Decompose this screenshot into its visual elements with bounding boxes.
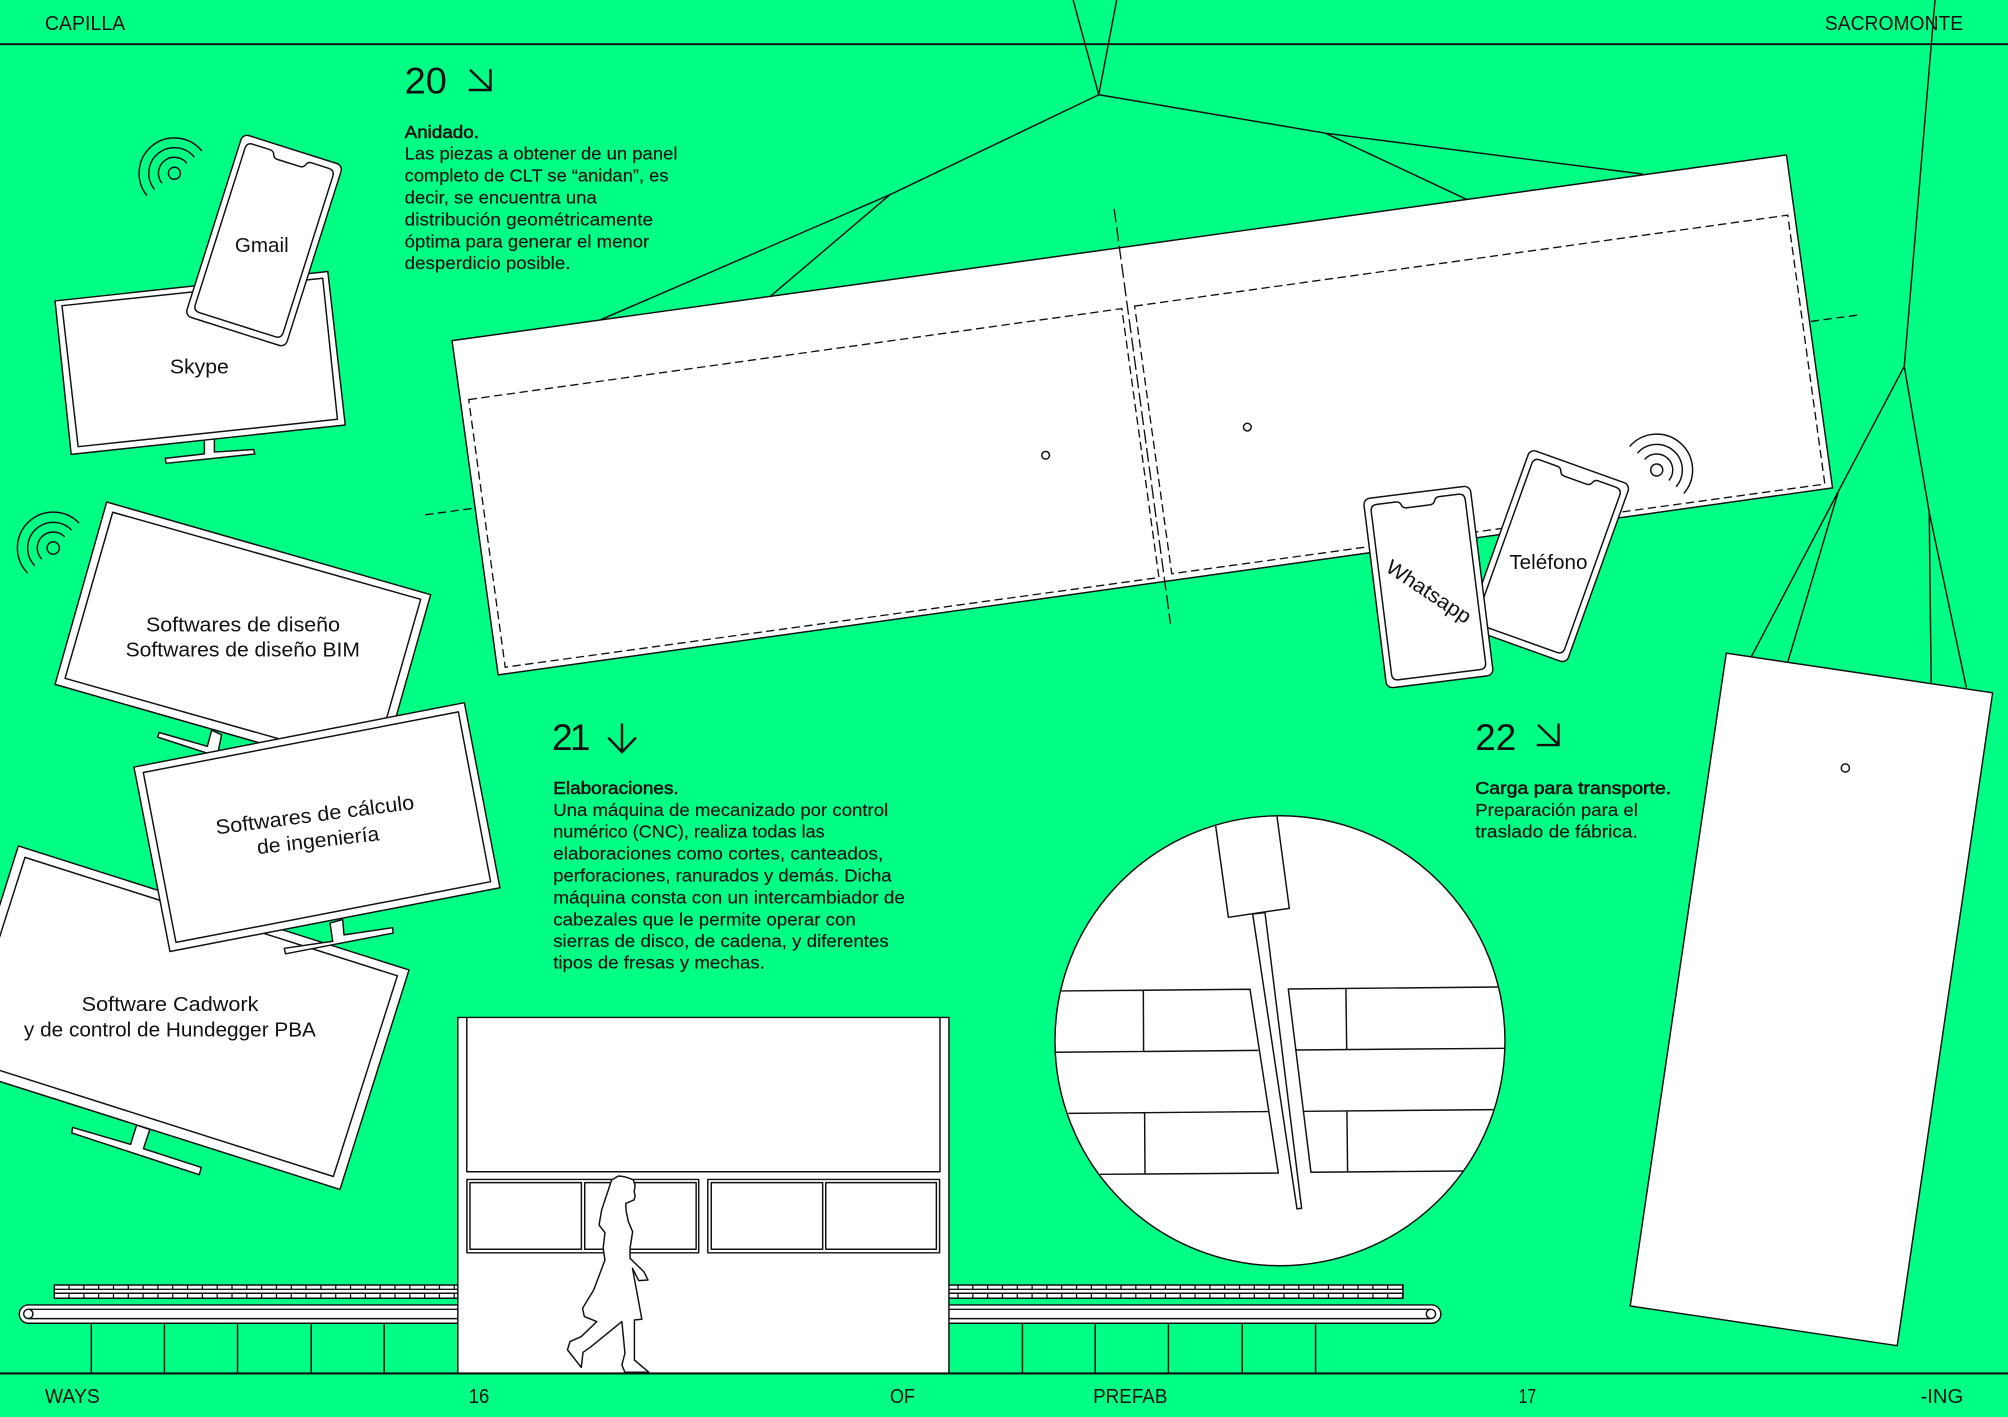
monitor: Skype: Skype	[170, 355, 229, 378]
text block: step 21: Elaboraciones.	[553, 778, 679, 798]
icon: wifi signal on panel	[1626, 419, 1707, 498]
icon: wifi signal left	[3, 497, 83, 577]
text block: step 20: Anidado.	[405, 122, 479, 142]
monitor: Softwares de diseño	[55, 502, 431, 779]
text block: step 20: desperdicio posible.	[405, 253, 571, 273]
text block: step 21: cabezales que le permite operar con	[553, 909, 856, 929]
text block: step 21: numérico (CNC), realiza todas las	[553, 822, 825, 842]
CNC detail circle	[1055, 816, 1505, 1266]
transport panel lifting hole	[1841, 764, 1849, 772]
monitor: Softwares de cálculo: Softwares de cálculo	[214, 791, 415, 839]
text block: step 20: Las piezas a obtener de un panel	[405, 144, 677, 164]
text block: step 21: tipos de fresas y mechas.	[553, 953, 765, 973]
stacked timber boards	[54, 1285, 1403, 1298]
footer label -ING: -ING	[1921, 1385, 1963, 1408]
text block: step 20: distribución geométricamente	[405, 210, 653, 230]
dashed right tick	[1811, 315, 1858, 321]
text block: step 21: elaboraciones como cortes, canteados,	[553, 844, 883, 864]
loaded panel for transport	[1630, 653, 1993, 1346]
monitor: Softwares de diseño: Softwares de diseño	[146, 614, 340, 637]
text block: step 22: Carga para transporte.	[1475, 778, 1671, 798]
step 20 heading number: 20	[405, 59, 447, 101]
CLT layers left	[1056, 989, 1278, 1174]
header left label: CAPILLA	[45, 12, 125, 35]
footer bar	[0, 1373, 2008, 1408]
silhouette: walking person	[567, 1176, 649, 1372]
text block: step 21: Una máquina de mecanizado por control	[553, 800, 888, 820]
header bar	[0, 12, 2008, 44]
monitor: Software Cadwork	[0, 846, 409, 1189]
text block: step 22	[1475, 778, 1671, 842]
CNC machine housing	[458, 1017, 949, 1373]
suspension cables: top	[597, 0, 1643, 321]
suspension cables: right	[1751, 0, 1966, 688]
panel lifting hole left	[1042, 451, 1049, 459]
arrow: step 21	[608, 724, 636, 752]
step 22 heading number: 22	[1475, 716, 1516, 758]
phone: Gmail: Gmail	[235, 234, 289, 257]
phone: Whatsapp: Whatsapp	[1382, 556, 1475, 628]
phone: Whatsapp	[1363, 486, 1494, 688]
machine window group left	[467, 1179, 699, 1253]
monitor: Softwares de cálculo: de ingeniería	[256, 822, 381, 859]
conveyor support legs	[91, 1323, 1316, 1373]
text block: step 20: decir, se encuentra una	[405, 188, 597, 208]
text block: step 20: completo de CLT se “anidan”, es	[405, 166, 669, 186]
arrow: step 22	[1537, 724, 1559, 745]
panel lifting hole right	[1243, 423, 1251, 431]
footer label WAYS: WAYS	[45, 1385, 100, 1408]
CLT layers right	[1288, 987, 1505, 1172]
text block: step 20: óptima para generar el menor	[405, 232, 649, 252]
text block: step 21: perforaciones, ranurados y demás. Dicha	[553, 866, 892, 886]
monitor: Softwares de cálculo	[134, 703, 500, 954]
footer label PREFAB: PREFAB	[1093, 1385, 1167, 1408]
monitor: Software Cadwork: Software Cadwork	[82, 993, 259, 1016]
monitor: Softwares de diseño: Softwares de diseño BIM	[126, 639, 360, 662]
text block: step 21	[553, 778, 905, 973]
phone: Teléfono: Teléfono	[1509, 551, 1587, 574]
step 21 heading number: 21	[552, 716, 590, 758]
dashed nested piece: right	[1135, 215, 1825, 574]
footer page 17: 17	[1519, 1385, 1536, 1408]
cutting blade	[1253, 913, 1302, 1209]
icon: wifi signal top left	[125, 124, 206, 200]
conveyor belt	[19, 1305, 1441, 1323]
phone: Teléfono	[1466, 449, 1630, 663]
machine upper panel	[467, 1017, 940, 1172]
text block: step 22: Preparación para el	[1475, 800, 1638, 820]
dashed left tick	[425, 508, 473, 515]
machine spindle head	[1216, 817, 1289, 917]
dashed centre cut line	[1114, 209, 1170, 624]
CLT panel with nesting layout	[425, 155, 1858, 675]
text block: step 22: traslado de fábrica.	[1475, 822, 1638, 842]
arrow: step 20	[469, 69, 490, 90]
text block: step 21: sierras de disco, de cadena, y diferentes	[553, 931, 889, 951]
monitor: Software Cadwork: y de control de Hundegger PBA	[24, 1019, 316, 1042]
machine window group right	[708, 1179, 940, 1253]
dashed nested piece: left	[469, 309, 1159, 667]
phone: Gmail	[185, 134, 343, 347]
footer label OF: OF	[890, 1385, 915, 1408]
text block: step 21: máquina consta con un intercambiador de	[553, 888, 905, 908]
footer page 16: 16	[469, 1385, 489, 1408]
text block: step 20	[405, 122, 677, 273]
header right label: SACROMONTE	[1825, 12, 1963, 35]
monitor: Skype	[55, 271, 345, 463]
